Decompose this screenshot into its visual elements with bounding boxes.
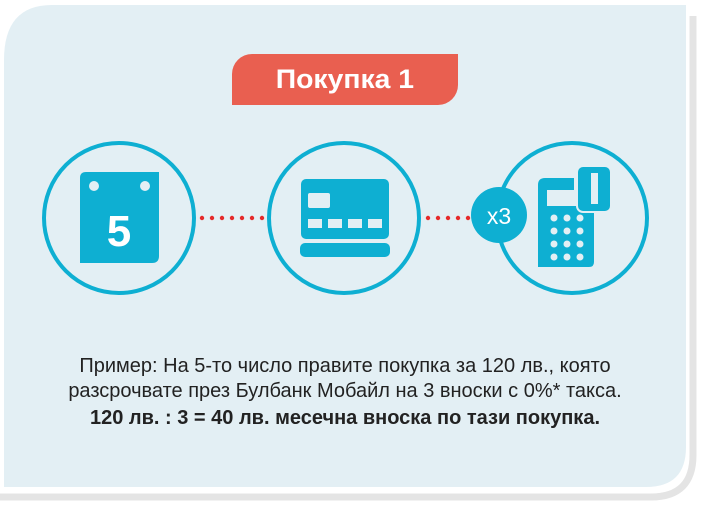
title tab xyxy=(232,54,458,105)
text line 3 bold: 120 лв. : 3 = 40 лв. месечна вноска по тази покупка. xyxy=(90,407,600,429)
icon: calendar: 5 xyxy=(107,207,131,256)
connector dots right xyxy=(426,216,470,220)
icons row xyxy=(42,141,649,295)
title tab: Покупка 1 xyxy=(276,64,414,94)
x3 badge: x3 xyxy=(487,203,511,229)
x3 badge xyxy=(471,187,527,243)
icon: card xyxy=(269,143,419,293)
text line 1: Пример: На 5-то число правите покупка за 120 лв., която xyxy=(79,355,611,377)
text line 2: разсрочвате през Булбанк Мобайл на 3 вноски с 0%* такса. xyxy=(68,380,622,402)
icon: phone xyxy=(497,143,647,293)
icon: calendar xyxy=(44,143,194,293)
connector dots left xyxy=(200,216,264,220)
